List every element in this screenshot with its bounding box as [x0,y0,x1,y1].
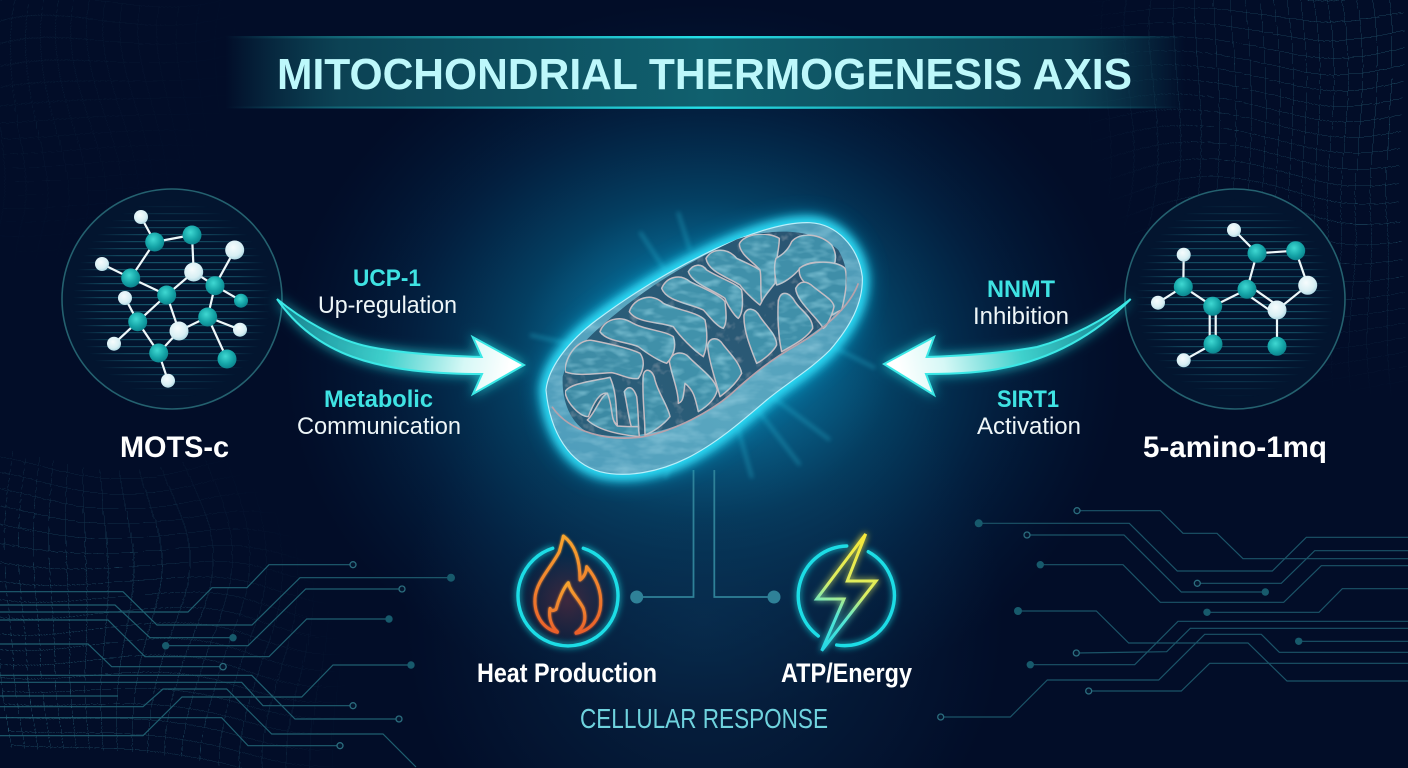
panel: MOTS-c molecule [62,189,282,409]
label: Communication: Communication [297,413,461,440]
label: Inhibition: Inhibition [973,303,1069,330]
label: Heat Production: Heat Production [477,658,657,688]
mitochondrion [546,223,862,474]
background mesh: top left [0,0,130,160]
arrow: left to mitochondrion [277,299,524,394]
bright rim glow [546,223,862,474]
arrow: right to mitochondrion [884,299,1131,395]
label: ATP/Energy: ATP/Energy [781,658,912,688]
membrane texture [546,223,862,474]
label: NNMT: NNMT [987,276,1055,303]
outer glow [546,223,862,474]
inner rim [552,283,858,438]
label: Metabolic: Metabolic [324,386,433,413]
inner cavity [563,232,847,436]
label: SIRT1: SIRT1 [997,386,1059,413]
matrix speckle [563,232,847,436]
circuit traces: right [938,508,1408,720]
connector lines to outputs [630,470,780,604]
circuit traces: left [0,562,455,767]
label: Cellular Response: CELLULAR RESPONSE [580,703,828,734]
outer membrane [546,223,862,474]
cristae folds [565,234,846,437]
background mesh: top right [1114,0,1407,368]
icon: lightning bolt [798,534,894,651]
label: Up-regulation: Up-regulation [318,292,457,319]
icon: flame [518,536,618,646]
title banner [225,36,1185,109]
label: UCP-1: UCP-1 [353,265,421,292]
label: MOTS-c: MOTS-c [120,431,229,464]
panel: 5-amino-1mq molecule [1125,189,1345,409]
title: MITOCHONDRIAL THERMOGENESIS AXIS [277,50,1132,99]
background mesh: bottom left [0,451,318,768]
label: 5-amino-1mq: 5-amino-1mq [1143,431,1327,464]
light rays around mitochondrion [530,212,875,478]
label: Activation: Activation [977,413,1081,440]
